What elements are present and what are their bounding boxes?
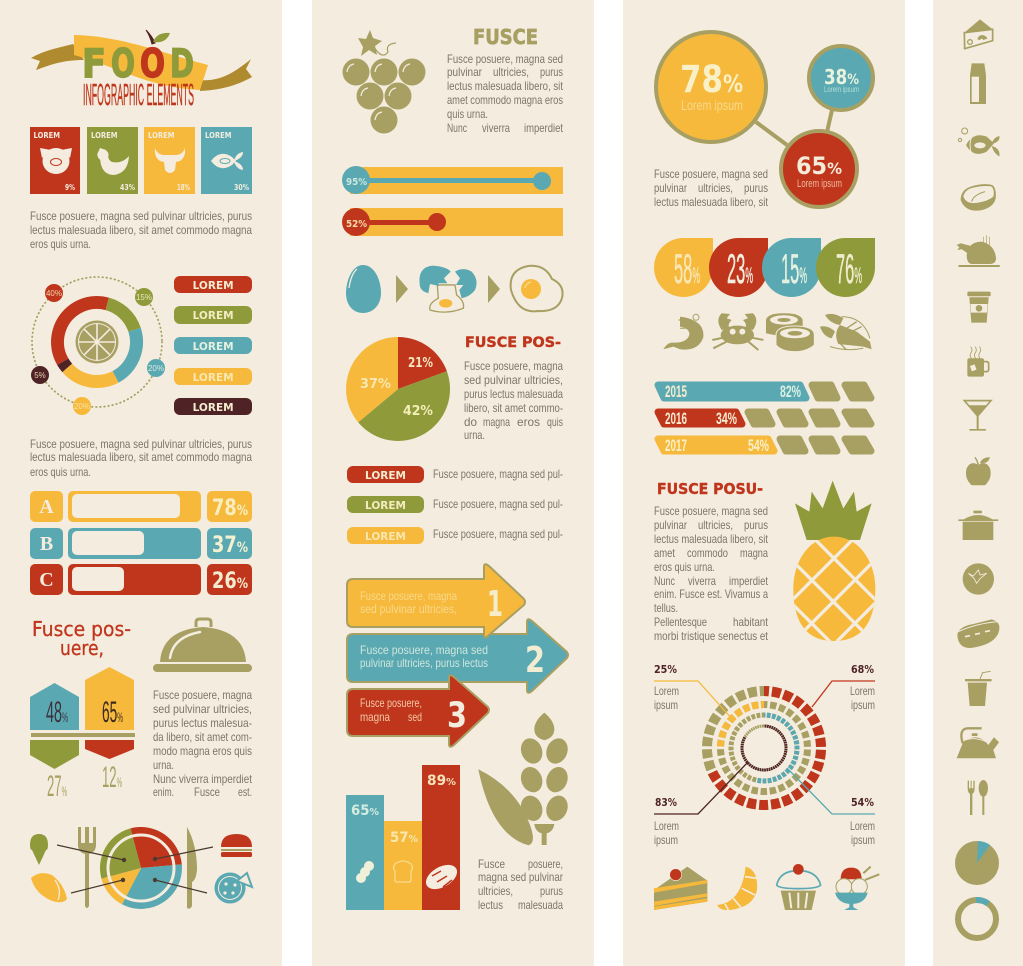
chart: pie 21 42 37: 42%: [403, 404, 433, 419]
bubble 65%: Lorem ipsum: [797, 178, 842, 190]
text block: pineapple: [654, 504, 769, 643]
callout 54%: Lorem: [850, 819, 875, 833]
callout 83%: ipsum: [654, 833, 678, 847]
text block: pie: purus lectus malesuada: [464, 387, 563, 401]
bubble 65%: 65%: [796, 152, 842, 180]
text block: pineapple: Pellentesque: [654, 615, 707, 629]
text block: pineapple: imperdiet: [729, 574, 769, 588]
text block: bubble: ultricies,: [698, 181, 733, 195]
text block: grapes: purus: [540, 65, 563, 79]
text block: pineapple: morbi tristique senectus et: [654, 629, 769, 643]
callout 25%: [654, 663, 733, 720]
icons upper group: [957, 19, 1000, 485]
legend pills: [174, 276, 252, 415]
arrow 3 red: 3: [447, 696, 467, 736]
legend rows: Fusce posuere, magna sed pul-: [433, 497, 563, 511]
text block: second paragraph: [30, 437, 252, 479]
callout 54%: 54%: [851, 796, 874, 809]
legend pills: LOREM: [193, 371, 234, 384]
panel: left column: INFOGRAPHIC ELEMENTS: [83, 77, 194, 112]
legend rows: Fusce posuere, magna sed pul-: [433, 467, 563, 481]
icon: cheese: [964, 19, 993, 49]
egg sequence: [346, 265, 563, 313]
legend rows: LOREM: [365, 469, 406, 482]
callout 25%: Lorem: [654, 684, 679, 698]
callout 83%: [654, 762, 748, 847]
card: chicken 43%: LOREM: [91, 131, 118, 140]
panel: middle column: [312, 0, 594, 966]
icon: shrimp: [663, 314, 703, 350]
text block: grapes: imperdiet: [524, 121, 564, 135]
chart: bar columns: 57%: [390, 830, 418, 846]
progress rows A B C: 37%: [212, 533, 248, 558]
bubble 38%: [809, 46, 873, 110]
icon: tea mug: [967, 347, 989, 377]
callout 54%: [787, 768, 875, 847]
icon: pie stat: [955, 841, 999, 885]
arrow 2: [488, 275, 500, 303]
chart: plate pie: [30, 827, 252, 909]
title: Food Infographic Elements: F: [82, 42, 106, 87]
legend rows: LOREM: [365, 530, 406, 543]
icon: citrus slice: [76, 320, 118, 364]
icons lower group: [957, 511, 999, 815]
chart: percent drops: [654, 238, 875, 297]
icon: ice cream: [30, 834, 48, 865]
text block: second paragraph: eros quis urna.: [30, 465, 91, 479]
seafood icons: [663, 313, 872, 352]
text block: grapes: Nunc: [447, 121, 467, 135]
icon: roast turkey: [957, 235, 1000, 267]
heading: Fusce posuere: uere,: [60, 636, 104, 660]
chart: bar columns: [346, 765, 461, 910]
orbit label 40%: 40%: [46, 289, 62, 298]
text block: pie: [464, 359, 563, 442]
text block: grapes: viverra: [482, 121, 510, 135]
panel: right column: [623, 0, 905, 966]
text block: grapes: amet commodo magna eros: [447, 93, 563, 107]
text block: hex side text: modo magna eros quis: [153, 744, 252, 758]
callout 68%: ipsum: [851, 698, 875, 712]
callout 68%: 68%: [851, 663, 874, 676]
icon: cake: [654, 867, 707, 910]
arrow 1: [396, 275, 408, 303]
text block: pie: Fusce posuere, magna: [464, 359, 563, 373]
text block: bubble: pulvinar: [654, 181, 687, 195]
text block: wheat: malesuada: [518, 898, 563, 912]
card: pig 9%: [30, 127, 80, 194]
heading: FUSCE POS-: FUSCE POS-: [465, 335, 561, 351]
card: fish 30%: 30%: [234, 183, 249, 192]
orbit label 5%: 5%: [34, 371, 46, 380]
icon: hot dog: [957, 619, 999, 648]
text block: hex side text: enim.: [153, 785, 174, 799]
legend rows: LOREM: [365, 499, 406, 512]
icon: croissant: [717, 867, 757, 910]
arrow 3 red: magna: [360, 710, 390, 724]
icon: pizza: [214, 872, 252, 904]
bubble 78%: [656, 32, 766, 142]
arrow 3 red: Fusce posuere,: [360, 696, 422, 710]
row 2015: [658, 382, 871, 401]
legend pills: LOREM: [193, 279, 234, 292]
bubble 78%: 78%: [680, 58, 743, 101]
text block: hex side text: Nunc viverra imperdiet: [153, 772, 253, 786]
orbit label 15%: 15%: [136, 293, 152, 302]
callout 54%: ipsum: [851, 833, 875, 847]
callout 25%: ipsum: [654, 698, 678, 712]
icon: tomato: [963, 563, 994, 595]
slider 52%: [342, 208, 563, 236]
card: fish 30%: [201, 127, 252, 194]
chart: hex bars: 65%: [102, 696, 123, 729]
text block: wheat: lectus: [478, 898, 503, 912]
progress rows A B C: C: [39, 569, 54, 591]
arrow 1 yellow: [347, 564, 525, 638]
arrow 2 teal: Fusce posuere, magna sed: [360, 643, 488, 657]
text block: second paragraph: lectus malesuada libero, sit amet commodo magna: [30, 450, 252, 464]
text block: pineapple: magna: [740, 546, 768, 560]
text block: grapes: quis urna.: [447, 107, 488, 121]
panel: left column: [0, 0, 282, 966]
icon: cloche: [153, 619, 252, 672]
icon: cracked egg: [419, 266, 477, 312]
text block: second paragraph: Fusce posuere, magna sed pulvinar ultricies, purus: [30, 437, 252, 451]
text block: bubble: Fusce posuere, magna sed: [654, 167, 768, 181]
text block: intro: [30, 209, 252, 251]
heading: Fusce posuere: Fusce pos-: [32, 617, 131, 641]
icon: lobster: [820, 314, 872, 350]
chart: bar columns: 65%: [351, 803, 379, 819]
arrow 1 yellow: 1: [487, 584, 503, 625]
chart: percent drops: 15%: [781, 245, 807, 292]
text block: hex side text: [153, 688, 253, 799]
chart: percent drops: 58%: [674, 245, 700, 292]
icon: whole egg: [346, 265, 381, 313]
text block: wheat: Fusce: [478, 857, 505, 871]
text block: pineapple: commodo: [687, 546, 728, 560]
text block: hex side text: da libero, sit amet com-: [153, 730, 252, 744]
text block: wheat: purus: [540, 884, 563, 898]
icon: apple: [966, 457, 991, 485]
progress rows A B C: A: [39, 496, 54, 518]
text block: grapes: ultricies,: [493, 65, 529, 79]
callout 68%: Lorem: [850, 684, 875, 698]
text block: intro: lectus malesuada libero, sit amet commodo magna: [30, 223, 252, 237]
text block: pineapple: amet: [654, 546, 676, 560]
card: pig 9%: LOREM: [34, 131, 60, 140]
icon: fish with bubbles: [958, 128, 999, 157]
callout 25%: 25%: [654, 663, 677, 676]
icon: taco: [31, 873, 67, 902]
chart: hex bars: [30, 667, 135, 803]
chart: radial rings: [703, 687, 825, 809]
arrow 1 yellow: sed pulvinar ultricies,: [360, 602, 457, 616]
text block: bubble: purus: [744, 181, 768, 195]
slider 95%: [342, 166, 563, 194]
text block: bubble: lectus malesuada libero, sit: [654, 195, 769, 209]
card: chicken 43%: 43%: [120, 183, 135, 192]
icon: coffee cup: [967, 292, 991, 323]
icon: sushi rolls: [766, 313, 814, 352]
chart: pie 21 42 37: 37%: [360, 377, 391, 392]
text block: intro: Fusce posuere, magna sed pulvinar ultricies, purus: [30, 209, 252, 223]
text block: hex side text: Fusce: [194, 785, 220, 799]
orbit label 20% teal: 20%: [148, 364, 164, 373]
card: cow 18%: [144, 127, 195, 194]
legend pills: LOREM: [193, 401, 234, 414]
text block: pineapple: Fusce posuere, magna sed: [654, 504, 768, 518]
title: Food Infographic Elements: D: [170, 42, 194, 87]
chart: percent drops: 76%: [836, 245, 862, 292]
chart: bar columns: 89%: [427, 773, 456, 789]
row 2017: 54%: [748, 436, 769, 455]
text block: pineapple: Nunc: [654, 574, 675, 588]
text block: intro: eros quis urna.: [30, 237, 91, 251]
callout 83%: Lorem: [654, 819, 679, 833]
text block: grapes: Fusce posuere, magna sed: [447, 52, 563, 66]
text block: pie: eros: [517, 415, 540, 429]
icon: pineapple: [793, 481, 877, 645]
text block: grapes: [447, 52, 564, 135]
arrow 1 yellow: Fusce posuere, magna: [360, 589, 457, 603]
icon: drink cup: [965, 671, 992, 706]
callout 68%: [812, 663, 875, 712]
text block: wheat: posuere,: [528, 857, 563, 871]
text block: pineapple: viverra: [688, 574, 716, 588]
row 2015: 82%: [780, 382, 801, 401]
icon: ring stat: [957, 899, 997, 939]
text block: bubble: [654, 167, 769, 209]
legend pills: LOREM: [193, 309, 234, 322]
arrow 2 teal: 2: [525, 640, 545, 681]
text block: wheat: [478, 857, 563, 912]
text block: pineapple: lectus malesuada libero, sit: [654, 532, 769, 546]
icon: wheat: [478, 713, 571, 845]
bubble 78%: Lorem ipsum: [681, 97, 743, 113]
row 2017: [658, 436, 871, 455]
text block: hex side text: urna.: [153, 758, 174, 772]
text block: pineapple: purus: [744, 518, 768, 532]
text block: pineapple: habitant: [733, 615, 769, 629]
text block: pie: magna: [483, 415, 510, 429]
row 2016: [658, 409, 871, 428]
row 2015: 2015: [665, 382, 687, 401]
progress rows A B C: B: [40, 533, 53, 555]
pointer lines: [57, 845, 213, 893]
icon: baguette: [422, 860, 461, 894]
heading: Fusce posuere: [32, 617, 131, 660]
callout 83%: 83%: [655, 796, 677, 809]
legend rows: [347, 466, 563, 544]
progress rows A B C: [30, 491, 252, 595]
chart: donut with orbit labels: [31, 277, 165, 415]
icon: burger: [221, 834, 252, 857]
icon: kettle: [957, 728, 999, 758]
icon: fork: [78, 827, 96, 908]
arrow 2 teal: pulvinar ultricies, purus lectus: [360, 656, 488, 670]
text block: pie: libero, sit amet commo-: [464, 401, 563, 415]
text block: pineapple: eros quis urna.: [654, 560, 715, 574]
arrow 3 red: sed: [408, 710, 422, 724]
chart: year bars: [658, 382, 871, 455]
chart: hex bars: 27%: [47, 770, 67, 803]
icon: sliced loaf: [356, 861, 374, 883]
arrow 3 red: [347, 675, 489, 747]
text block: hex side text: Fusce posuere, magna: [153, 688, 252, 702]
icon: crab: [712, 313, 763, 350]
text block: pineapple: enim. Fusce est. Vivamus a: [654, 587, 768, 601]
arrow 2 teal: [347, 619, 568, 693]
text block: wheat: magna sed pulvinar: [478, 870, 563, 884]
icon: steak: [961, 184, 996, 211]
text block: pie: urna.: [464, 428, 485, 442]
icon: grapes: [342, 30, 426, 134]
card: fish 30%: LOREM: [205, 131, 232, 140]
card: pig 9%: 9%: [65, 183, 75, 192]
row 2017: 2017: [665, 436, 687, 455]
text block: wheat: ultricies,: [478, 884, 513, 898]
icon: cupcake: [777, 864, 821, 910]
icon: knife: [187, 827, 197, 909]
row 2016: 2016: [665, 409, 687, 428]
chart: hex bars: 48%: [46, 696, 68, 729]
text block: pie: do: [464, 415, 477, 429]
icon: sundae: [835, 867, 879, 910]
progress rows A B C: 78%: [212, 496, 248, 521]
bubble 38%: Lorem ipsum: [824, 85, 859, 94]
card: cow 18%: LOREM: [148, 131, 175, 140]
heading: FUSCE: FUSCE: [473, 25, 538, 49]
slider 52%: 52%: [346, 219, 367, 230]
progress rows A B C: 26%: [212, 569, 248, 594]
card: chicken 43%: [87, 127, 138, 194]
row 2016: 34%: [716, 409, 737, 428]
title: Food Infographic Elements: O: [140, 42, 165, 87]
title: Food Infographic Elements: [31, 30, 252, 112]
icon: fried egg: [511, 266, 563, 311]
icon: milk carton: [970, 63, 986, 104]
chart: percent drops: 23%: [727, 245, 753, 292]
icon: martini: [964, 401, 991, 431]
text block: pie: quis: [547, 415, 563, 429]
dessert icons: [654, 864, 879, 910]
orbit label 20% yellow: 20%: [74, 402, 90, 411]
icon: fork and spoon: [968, 780, 988, 815]
text block: grapes: lectus malesuada libero, sit: [447, 79, 564, 93]
bubble 38%: 38%: [824, 65, 859, 89]
chart: hex bars: 12%: [102, 761, 122, 794]
text block: pineapple: pulvinar: [654, 518, 687, 532]
bubble 65%: [781, 131, 857, 207]
title: Food Infographic Elements: O: [111, 42, 135, 87]
chart: pie 21 42 37: 21%: [408, 356, 433, 371]
text block: pineapple: tellus.: [654, 601, 678, 615]
chart: pie 21 42 37: [346, 337, 450, 441]
text block: hex side text: est.: [238, 785, 252, 799]
heading: FUSCE POSU-: FUSCE POSU-: [657, 480, 763, 498]
text block: grapes: pulvinar: [447, 65, 482, 79]
icon: toast: [394, 861, 412, 882]
legend pills: LOREM: [193, 340, 234, 353]
card: cow 18%: 18%: [177, 183, 190, 192]
text block: pie: sed pulvinar ultricies,: [464, 373, 563, 387]
text block: hex side text: purus lectus malesua-: [153, 716, 252, 730]
text block: hex side text: sed pulvinar ultricies,: [153, 702, 252, 716]
bubble chart: [656, 32, 873, 207]
panel: icon strip: [933, 0, 1023, 966]
icon: pot: [958, 511, 998, 540]
legend rows: Fusce posuere, magna sed pul-: [433, 527, 563, 541]
text block: pineapple: ultricies,: [698, 518, 733, 532]
slider 95%: 95%: [346, 177, 367, 188]
